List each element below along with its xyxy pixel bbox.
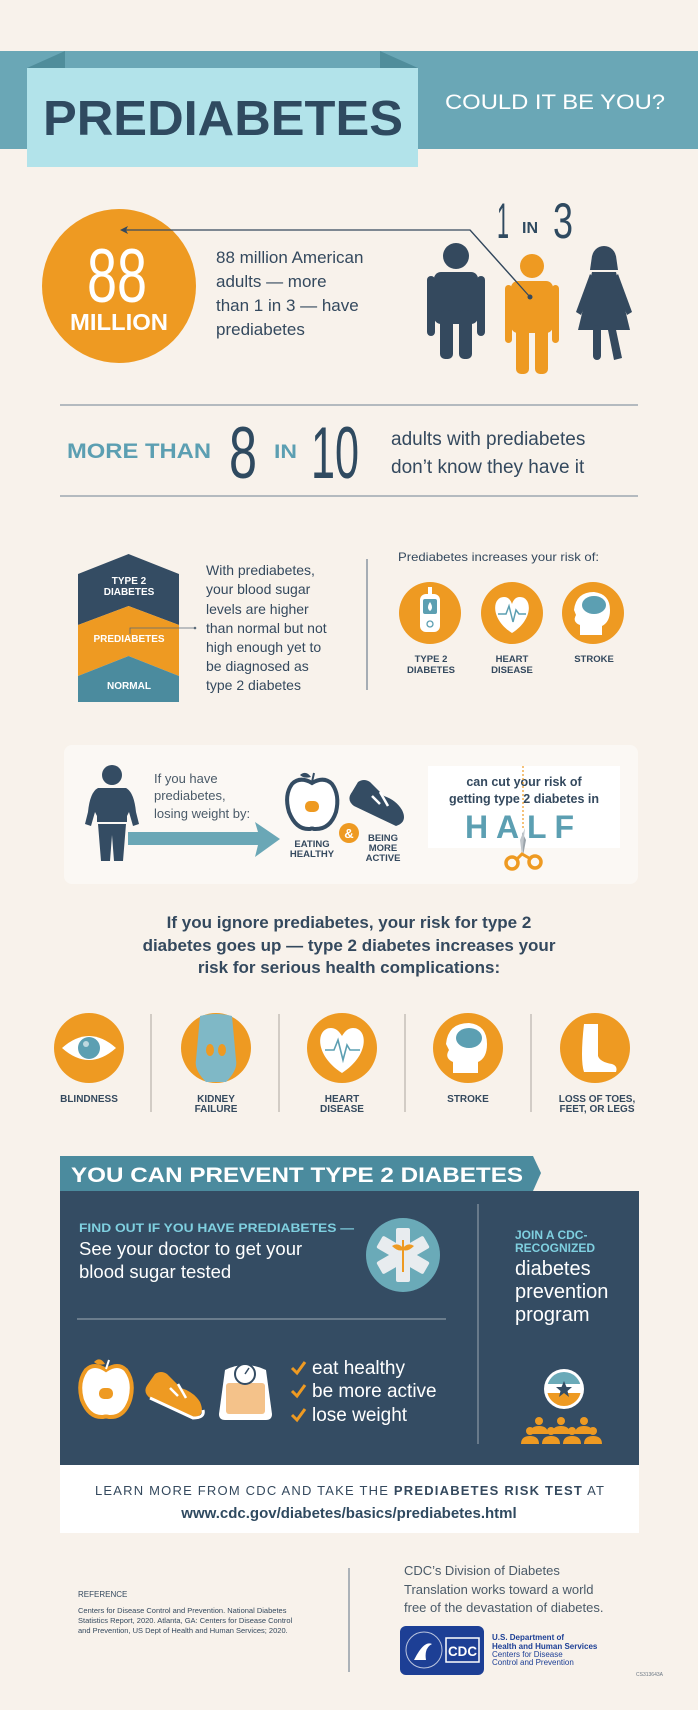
heading: ignore prediabetes: diabetes goes up — type 2 diabetes increases your — [143, 936, 556, 955]
list: checks — [292, 1358, 442, 1426]
callout: learn more — [60, 1465, 639, 1533]
callout: learn more: www.cdc.gov/diabetes/basics/prediabetes.html — [180, 1505, 517, 1522]
callout: learn more: LEARN MORE FROM CDC AND TAKE THE PREDIABETES RISK TEST AT — [95, 1483, 604, 1498]
text: 88 million description: prediabetes — [216, 320, 305, 339]
banner: you can prevent: YOU CAN PREVENT TYPE 2 DIABETES — [71, 1163, 523, 1187]
icon: scale — [219, 1364, 272, 1420]
subtitle: COULD IT BE YOU? — [445, 91, 665, 114]
panel: prevention — [60, 1191, 639, 1465]
heading: ignore prediabetes: If you ignore prediabetes, your risk for type 2 — [167, 913, 531, 932]
callout: cut risk in half: can cut your risk of — [466, 775, 582, 789]
icon: shoe — [349, 780, 404, 826]
text: 88 million description: adults — more — [216, 272, 327, 291]
panel: complications: BLINDNESS — [60, 1094, 118, 1105]
panel: complications — [54, 1013, 635, 1115]
text: 88 million description: 88 million American — [216, 248, 363, 267]
logo: hhs cdc: Centers for Disease — [492, 1650, 563, 1659]
icon: brain — [562, 582, 624, 644]
text: reference: Statistics Report, 2020. Atlanta, GA: Centers for Disease Control — [78, 1616, 293, 1625]
panel: complications: HEART — [325, 1094, 359, 1105]
panel: losing weight: BEING — [368, 833, 398, 844]
stat: 8 in 10: IN — [274, 442, 297, 463]
text: join cdc program — [515, 1228, 614, 1326]
arrow: connector to circle — [120, 226, 532, 300]
text: prediabetes definition: With prediabetes, — [206, 562, 315, 578]
header banner — [0, 51, 698, 167]
text: reference — [78, 1590, 294, 1635]
text: prediabetes definition: be diagnosed as — [206, 658, 309, 674]
icon: glucose meter — [399, 582, 461, 644]
panel: prevention: blood sugar tested — [79, 1261, 231, 1282]
panel: complications: DISEASE — [320, 1104, 364, 1115]
stat: 8 in 10: 8 — [229, 413, 257, 494]
panel: risks: Prediabetes increases your risk of: — [398, 550, 599, 564]
icon: heart — [481, 582, 543, 644]
heading: ignore prediabetes: risk for serious health complications: — [198, 958, 500, 977]
banner: you can prevent — [60, 1156, 541, 1191]
text: join cdc program: RECOGNIZED — [515, 1241, 595, 1255]
text: prediabetes definition: than normal but not — [206, 620, 327, 636]
logo: hhs cdc: CDC — [448, 1643, 477, 1659]
chart: blood sugar levels chevron: PREDIABETES — [93, 634, 165, 645]
chart: blood sugar levels chevron — [78, 554, 196, 702]
panel: risks: TYPE 2 — [415, 654, 447, 665]
callout: cut risk in half: getting type 2 diabetes in — [449, 792, 599, 806]
panel: complications: LOSS OF TOES, — [559, 1094, 635, 1105]
panel: complications: STROKE — [447, 1094, 489, 1105]
logo: hhs cdc: Health and Human Services — [492, 1642, 598, 1651]
logo: hhs cdc — [400, 1626, 664, 1678]
text: 88 million description: than 1 in 3 — have — [216, 296, 359, 315]
panel: risks: DISEASE — [491, 665, 533, 676]
text: if you have prediabetes: If you have — [154, 771, 218, 786]
icon: stroke — [433, 1013, 503, 1083]
text: prediabetes definition: your blood sugar — [206, 581, 311, 597]
stat: 1 in 3: 1 — [497, 193, 509, 249]
stat: 8 in 10: adults with prediabetes — [391, 429, 585, 450]
panel: losing weight: ACTIVE — [366, 853, 400, 864]
title: PREDIABETES — [43, 92, 403, 146]
text: cdc division: free of the devastation of diabetes. — [404, 1600, 603, 1615]
text: join cdc program: program — [515, 1304, 589, 1326]
text: cdc division: Translation works toward a world — [404, 1582, 594, 1597]
text: if you have prediabetes: losing weight by: — [154, 806, 250, 821]
arrow — [128, 822, 280, 857]
heading: ignore prediabetes — [143, 913, 556, 977]
panel: losing weight: EATING — [294, 839, 330, 850]
text: cdc division: CDC’s Division of Diabetes — [404, 1563, 560, 1578]
icon: apple — [80, 1359, 132, 1417]
stat: 8 in 10: don’t know they have it — [391, 457, 585, 478]
stat: 1 in 3: IN — [522, 220, 538, 237]
icon: kidney — [181, 1013, 251, 1083]
stat: 1 in 3: 3 — [553, 193, 573, 249]
icon: scissors — [506, 828, 541, 869]
logo: hhs cdc: CS313643A — [636, 1672, 664, 1678]
text: reference: Centers for Disease Control and Prevention. National Diabetes — [78, 1606, 287, 1615]
icon: shoe — [145, 1372, 203, 1418]
icon: apple — [287, 773, 337, 829]
callout: cut risk in half — [428, 766, 620, 869]
logo: hhs cdc: U.S. Department of — [492, 1633, 564, 1642]
list: checks: be more active — [312, 1381, 437, 1402]
icon: foot — [560, 1013, 630, 1083]
text: prediabetes definition — [206, 562, 331, 693]
text: find out: FIND OUT IF YOU HAVE PREDIABETES — — [79, 1221, 354, 1235]
text: if you have prediabetes: prediabetes, — [154, 788, 226, 803]
text: prediabetes definition: high enough yet to — [206, 639, 321, 655]
text: cdc division — [404, 1563, 603, 1615]
panel: complications: FEET, OR LEGS — [559, 1104, 635, 1115]
stat: 88 million circle — [42, 209, 196, 363]
stat: 88 million circle: 88 — [87, 234, 147, 319]
stat: 8 in 10 — [60, 405, 638, 496]
icon: medical star — [366, 1218, 440, 1292]
stat: 1 in 3 — [497, 193, 573, 249]
icon: eye — [54, 1013, 124, 1083]
text: prediabetes definition: levels are higher — [206, 601, 309, 617]
panel: risks: HEART — [496, 654, 529, 665]
logo: hhs cdc: Control and Prevention — [492, 1658, 574, 1667]
text: join cdc program: diabetes — [515, 1258, 591, 1280]
stat: 8 in 10: 10 — [311, 413, 359, 494]
list: checks: lose weight — [312, 1405, 408, 1426]
text: join cdc program: JOIN A CDC- — [515, 1228, 587, 1242]
text: prediabetes definition: type 2 diabetes — [206, 677, 301, 693]
panel: losing weight: HEALTHY — [290, 849, 335, 860]
panel: risks: DIABETES — [407, 665, 455, 676]
chart: blood sugar levels chevron: TYPE 2 — [112, 576, 147, 587]
chart: blood sugar levels chevron: NORMAL — [107, 681, 151, 692]
text: 88 million description — [216, 248, 368, 339]
panel: risks — [398, 550, 624, 676]
icon: cdc badge and crowd — [521, 1369, 602, 1444]
panel: complications: FAILURE — [195, 1104, 238, 1115]
icon: ampersand: & — [344, 826, 354, 841]
list: checks: eat healthy — [312, 1358, 405, 1379]
stat: 8 in 10: MORE THAN — [67, 440, 211, 463]
panel: prevention: See your doctor to get your — [79, 1238, 302, 1259]
panel: complications: KIDNEY — [197, 1094, 235, 1105]
callout: cut risk in half: HALF — [465, 809, 574, 845]
icon: heart disease — [307, 1013, 377, 1083]
text: reference: and Prevention, US Dept of Health and Human Services; 2020. — [78, 1626, 288, 1635]
icon: people — [427, 230, 632, 374]
stat: 88 million circle: MILLION — [70, 309, 168, 335]
text: join cdc program: prevention — [515, 1281, 608, 1303]
panel: losing weight: MORE — [369, 843, 397, 854]
icon: person — [85, 765, 139, 861]
icon: ampersand — [339, 823, 359, 843]
chart: blood sugar levels chevron: DIABETES — [104, 587, 155, 598]
panel: risks: STROKE — [574, 654, 614, 665]
text: reference: REFERENCE — [78, 1590, 127, 1599]
panel: losing weight — [64, 745, 638, 884]
